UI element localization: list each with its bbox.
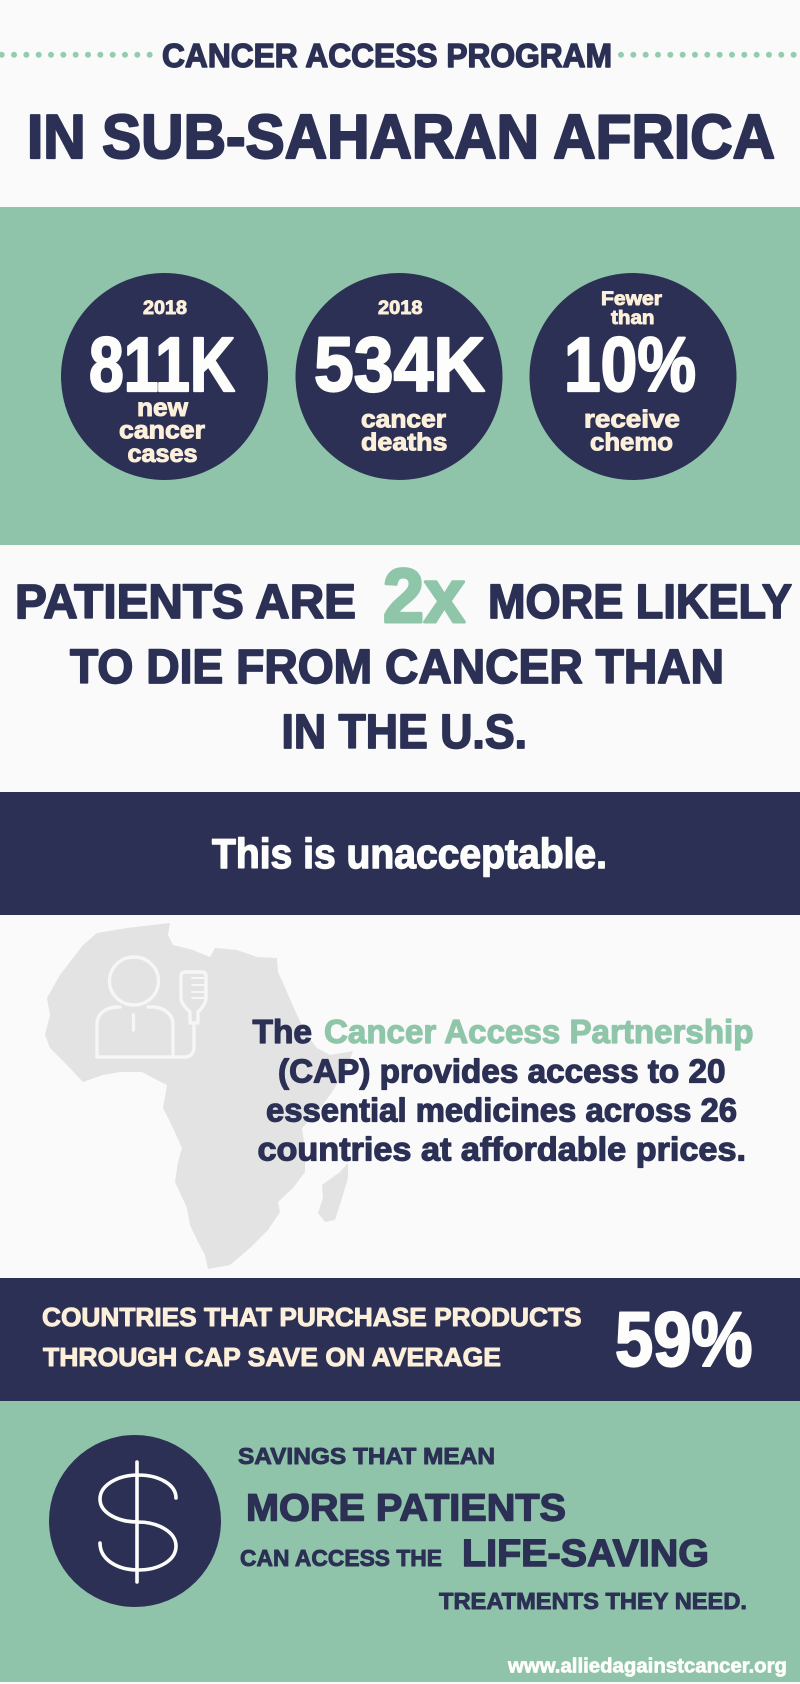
text block: patients are 2x more likely: IN THE U.S. <box>282 706 527 759</box>
text block: partnership description: Cancer Access Partnership <box>324 1013 754 1050</box>
text block: savings message: TREATMENTS THEY NEED. <box>439 1588 747 1614</box>
title: in sub-saharan africa: IN SUB-SAHARAN AFRICA <box>27 103 775 172</box>
stat circle: fewer than 10% receive chemo: receive <box>584 406 680 434</box>
icon: dollar sign <box>49 1435 221 1607</box>
title: cancer access program: CANCER ACCESS PROGRAM <box>162 37 612 74</box>
text block: partnership description: essential medicines across 26 <box>266 1092 737 1128</box>
banner: 59% savings: COUNTRIES THAT PURCHASE PRODUCTS <box>42 1302 582 1332</box>
text block: partnership description: (CAP) provides access to 20 <box>278 1052 726 1090</box>
text block: patients are 2x more likely <box>15 554 792 759</box>
stat circle: 534K cancer deaths: deaths <box>361 428 448 456</box>
stat circle: fewer than 10% receive chemo: Fewer <box>601 289 663 310</box>
stat circle: 811K new cancer cases: cancer <box>119 416 205 444</box>
stat circle: 811K new cancer cases: 2018 <box>143 298 187 319</box>
text block: savings message <box>238 1443 747 1614</box>
banner: 59% savings: 59% <box>615 1297 752 1383</box>
icon: patient with iv drip <box>97 957 206 1057</box>
stat circle: 811K new cancer cases: cases <box>128 440 198 468</box>
banner: 59% savings: THROUGH CAP SAVE ON AVERAGE <box>43 1342 501 1372</box>
map: africa silhouette <box>45 923 353 1269</box>
text block: partnership description: The <box>252 1013 312 1050</box>
stat circle: fewer than 10% receive chemo: chemo <box>590 428 673 456</box>
panel: header <box>0 0 800 207</box>
panel: cancer access partnership <box>45 923 754 1269</box>
text block: savings message: MORE PATIENTS <box>246 1488 566 1530</box>
banner: 59% savings <box>0 1278 800 1401</box>
text block: savings message: CAN ACCESS THE <box>240 1545 442 1571</box>
stat circle: 811K new cancer cases: new <box>137 394 189 422</box>
text block: patients are 2x more likely: TO DIE FROM CANCER THAN <box>70 641 724 694</box>
website url: www.alliedagainstcancer.org <box>507 1656 787 1678</box>
banner: this is unacceptable <box>0 792 800 915</box>
stat circle: 534K cancer deaths: 534K <box>314 322 485 408</box>
text block: savings message: SAVINGS THAT MEAN <box>238 1443 495 1469</box>
stat circle: 811K new cancer cases <box>61 273 268 480</box>
panel: savings meaning <box>0 1401 800 1682</box>
stat circle: 811K new cancer cases: 811K <box>89 322 235 408</box>
text block: partnership description: countries at affordable prices. <box>258 1130 746 1168</box>
stat circle: 534K cancer deaths <box>296 273 502 480</box>
stat circle: 534K cancer deaths: 2018 <box>378 298 422 319</box>
stat circle: 534K cancer deaths: cancer <box>361 406 446 434</box>
stat circle: fewer than 10% receive chemo: than <box>611 308 654 329</box>
text block: savings message: LIFE-SAVING <box>462 1533 709 1575</box>
stat circle: fewer than 10% receive chemo <box>530 273 736 480</box>
stat circle: fewer than 10% receive chemo: 10% <box>564 322 696 408</box>
panel: statistics band <box>0 207 800 545</box>
text block: patients are 2x more likely: PATIENTS ARE <box>15 576 356 629</box>
text block: partnership description <box>252 1013 754 1168</box>
text block: patients are 2x more likely: 2x <box>383 554 465 639</box>
banner: this is unacceptable: This is unacceptable. <box>212 830 607 877</box>
